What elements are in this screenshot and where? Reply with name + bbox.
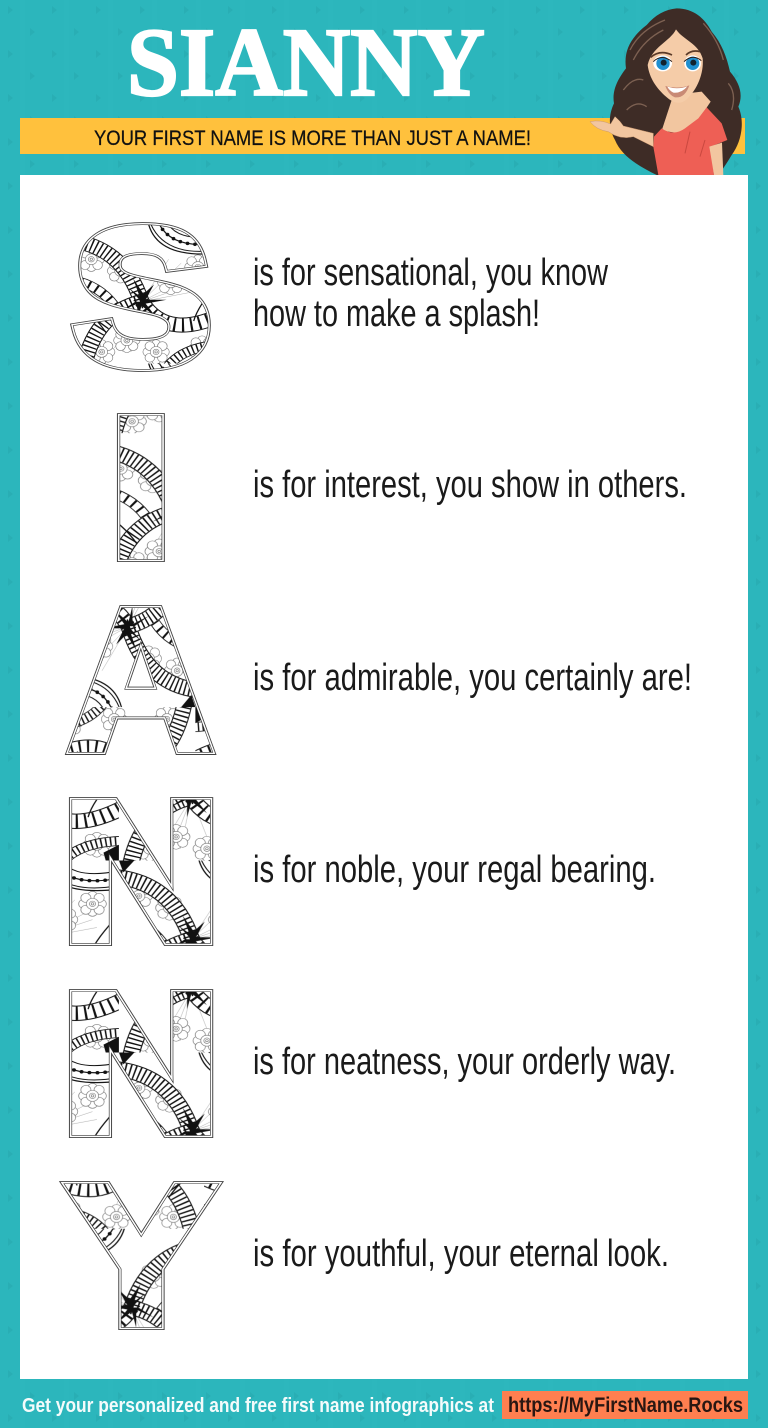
letter Y: Y <box>68 1145 214 1366</box>
eyes <box>653 55 701 71</box>
row: N <box>62 762 656 982</box>
arm <box>590 117 653 147</box>
letter Y: Y <box>68 1145 214 1366</box>
neck <box>662 92 711 133</box>
text: S line: how to make a splash! <box>253 293 540 335</box>
letter A: A <box>68 567 214 792</box>
letter I: I <box>110 377 172 597</box>
letter S: S <box>72 189 212 405</box>
content panel <box>20 175 748 1379</box>
letter A: A <box>68 567 214 792</box>
row: Y <box>68 1145 669 1366</box>
letter A: A <box>68 567 214 792</box>
letter N: N <box>62 762 221 982</box>
letter N: N <box>62 954 221 1174</box>
shirt <box>653 107 727 175</box>
banner text: YOUR FIRST NAME IS MORE THAN JUST A NAME! <box>94 127 531 150</box>
mouth <box>665 85 689 97</box>
letter N: N <box>62 954 221 1174</box>
row: N second <box>62 954 676 1174</box>
face <box>648 29 703 103</box>
text: N line: is for noble, your regal bearing. <box>253 849 656 891</box>
letter Y: Y <box>68 1145 214 1366</box>
letter N: N <box>62 954 221 1174</box>
letter S: S <box>72 189 212 405</box>
row: I <box>110 377 687 597</box>
letter Y: Y <box>68 1145 214 1366</box>
eyebrows <box>651 51 700 57</box>
row: S <box>72 189 608 405</box>
letter N: N <box>62 762 221 982</box>
letter N: N <box>62 762 221 982</box>
letter I: I <box>110 377 172 597</box>
letter S: S <box>72 189 212 405</box>
letter N: N <box>62 762 221 982</box>
row: A <box>68 567 692 792</box>
text: S line: is for sensational, you know <box>253 252 608 294</box>
footer note: Get your personalized and free first name infographics at <box>22 1395 494 1417</box>
letter I: I <box>110 377 172 597</box>
letter N: N <box>62 954 221 1174</box>
letter A: A <box>68 567 214 792</box>
icon: cartoon woman <box>590 8 742 175</box>
letter S: S <box>72 189 212 405</box>
banner <box>20 118 745 154</box>
title: SIANNY <box>127 9 485 116</box>
letter I: I <box>110 377 172 597</box>
